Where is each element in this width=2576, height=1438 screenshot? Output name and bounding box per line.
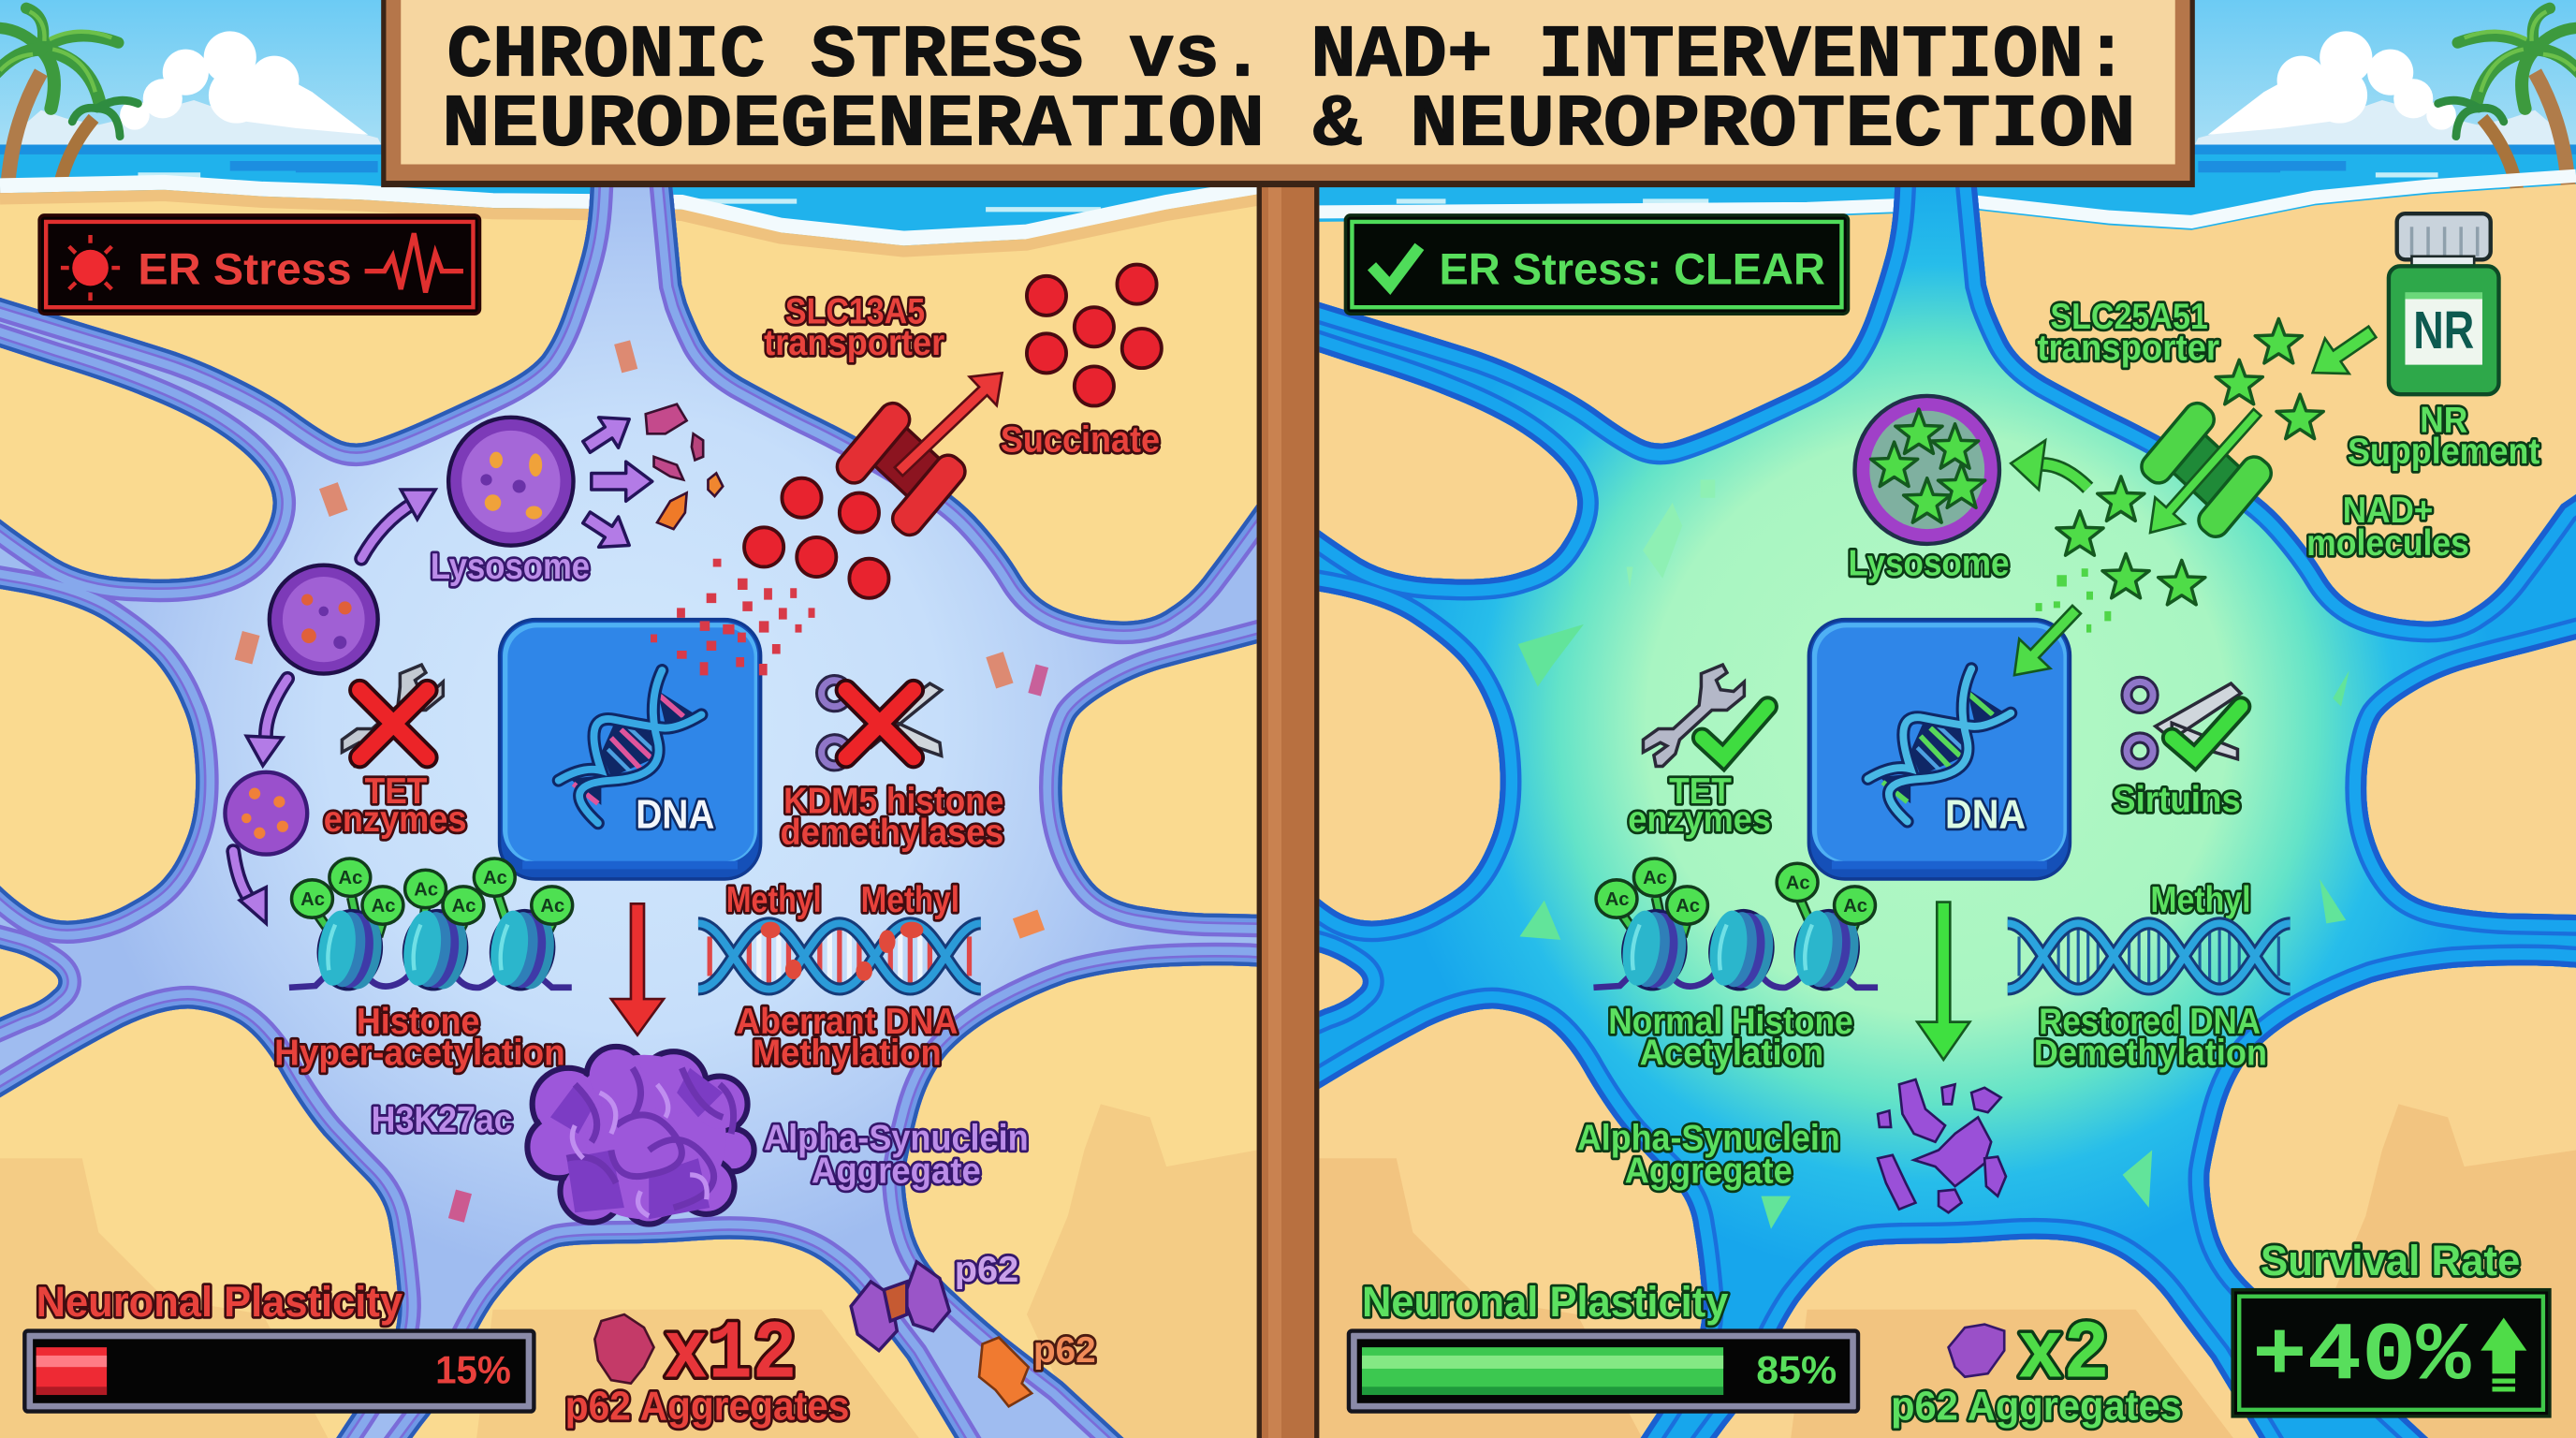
- succinate molecules outside: [1027, 265, 1162, 405]
- background: sky and sea: [0, 0, 2576, 246]
- arrows: lysosome pathway: [233, 490, 435, 923]
- arrow: NAD+ to nucleus: [1998, 594, 2092, 690]
- debris fragments: [646, 404, 723, 529]
- chart: normal nucleosomes: Ac: [1786, 873, 1810, 893]
- label: H3K27ac: H3K27ac: [372, 1100, 513, 1140]
- label: TET enzymes (left): TET: [365, 771, 428, 812]
- chart: hyper-acetylated nucleosomes: Ac: [452, 896, 476, 917]
- label: Normal Histone Acetylation: [1608, 1002, 1853, 1073]
- succinate molecules inside: [744, 478, 889, 598]
- background: left beach sand: [0, 183, 1265, 1438]
- label: SLC25A51 transporter: transporter: [2037, 328, 2219, 368]
- aggregate: broken fragments: [1878, 1079, 2006, 1212]
- neuron: left cell body and dendrites: [0, 148, 1314, 1438]
- icon: inhibited TET enzyme wrench: [342, 665, 443, 767]
- p62 orange clump: [979, 1338, 1032, 1406]
- icon: aberrantly methylated DNA: [698, 922, 981, 990]
- label: TET enzymes (left): [324, 771, 466, 840]
- stat box: +40% survival: [2232, 1290, 2550, 1416]
- arrow: protection pathway: [1917, 902, 1969, 1060]
- chart: hyper-acetylated nucleosomes: Ac: [372, 896, 395, 917]
- label: p62 upper: p62: [955, 1250, 1018, 1290]
- aggregate: large alpha-synuclein clump: [527, 1047, 754, 1224]
- chart: hyper-acetylated nucleosomes: Ac: [483, 868, 507, 888]
- label: Histone Hyper-acetylation: [274, 1002, 565, 1073]
- icon: NR supplement bottle: [2389, 213, 2499, 394]
- p62 knot on axon: [851, 1262, 949, 1351]
- neuron: right cell body and dendrites: [1255, 148, 2576, 1438]
- icon: heartbeat: [365, 233, 463, 292]
- wooden divider post: [1257, 165, 1319, 1438]
- gauge: neuronal plasticity 15%: [24, 1331, 534, 1412]
- panel: NAD+ intervention (right): [1255, 148, 2576, 1438]
- label: NR Supplement: NR: [2420, 401, 2467, 441]
- label: Aberrant DNA Methylation: Aberrant DNA: [736, 1002, 958, 1042]
- label: Alpha-Synuclein Aggregate (left): [764, 1119, 1029, 1192]
- gauge fill: [1362, 1347, 1723, 1395]
- label: NR Supplement: Supplement: [2348, 432, 2540, 472]
- label: Lysosome (stressed): Lysosome: [431, 547, 590, 587]
- label: Restored DNA Demethylation: Demethylation: [2034, 1033, 2267, 1073]
- label: Aberrant DNA Methylation: [736, 1002, 958, 1073]
- text: DNA: DNA: [636, 792, 714, 838]
- label: p62 lower: p62: [1033, 1330, 1096, 1371]
- label: Alpha-Synuclein Aggregate (left): Alpha-Synuclein: [764, 1119, 1029, 1159]
- icon: stressed DNA helix: [559, 670, 701, 823]
- stat: x12: x12: [664, 1310, 797, 1402]
- label: Survival Rate: Survival Rate: [2261, 1237, 2520, 1284]
- text: ER Stress: ER Stress: [138, 245, 352, 295]
- label: NAD+ molecules: [2306, 491, 2469, 564]
- lysosome: medium: [270, 565, 378, 674]
- damage flecks: [235, 340, 1048, 1223]
- value: 85%: [1756, 1348, 1837, 1392]
- label: Alpha-Synuclein Aggregate (right): Aggregate: [1625, 1152, 1793, 1192]
- transporter: left membrane channel: [832, 398, 971, 540]
- NAD+ molecules: stars: [2056, 318, 2323, 605]
- lysosome: large degrading: [448, 418, 574, 546]
- chart: normal nucleosomes: Ac: [1676, 896, 1700, 917]
- arrow: succinate export: [886, 359, 1016, 486]
- icon: active sirtuin scissors: [2127, 682, 2241, 764]
- label: Lysosome (restored): Lysosome: [1848, 543, 2009, 583]
- arrow: stress leads to aggregation: [611, 903, 664, 1035]
- chart: hyper-acetylated nucleosomes: Ac: [414, 879, 438, 900]
- label: NAD+ molecules: molecules: [2306, 523, 2469, 564]
- label: NAD+ molecules: NAD+: [2343, 491, 2433, 531]
- chart: normal nucleosomes: Ac: [1643, 868, 1667, 888]
- label: p62 Aggregates (right): p62 Aggregates: [1891, 1383, 2182, 1429]
- label: KDM5 histone demethylases: KDM5 histone: [783, 782, 1003, 822]
- text: ER Stress CLEAR: ER Stress: CLEAR: [1439, 245, 1825, 295]
- arrow: NAD+ import: [2135, 400, 2272, 546]
- background: right beach sand: [1319, 176, 2576, 1438]
- title line 2: NEURODEGENERATION & NEUROPROTECTION: [442, 82, 2136, 167]
- label: Alpha-Synuclein Aggregate (right): Alpha-Synuclein: [1577, 1119, 1840, 1159]
- label: Restored DNA Demethylation: Restored DNA: [2039, 1002, 2261, 1042]
- label: SLC25A51 transporter: SLC25A51: [2050, 297, 2208, 337]
- chart: hyper-acetylated nucleosomes: Ac: [339, 868, 362, 888]
- chart: hyper-acetylated nucleosomes: [289, 858, 573, 995]
- lysosome: restored with NAD+: [1855, 396, 1999, 544]
- transporter: right membrane channel: [2136, 398, 2276, 542]
- icon: up arrow: [2481, 1318, 2526, 1392]
- icon: p62 clump stat: [594, 1314, 654, 1384]
- label: TET enzymes (right): [1628, 771, 1771, 840]
- arrow: curved NAD+ to lysosome: [2011, 440, 2088, 490]
- icon: NR supplement bottle: NR: [2413, 301, 2474, 360]
- label: Neuronal Plasticity (left): Neuronal Plasticity: [37, 1278, 403, 1326]
- chart: normal nucleosomes: Ac: [1605, 889, 1630, 910]
- label: Normal Histone Acetylation: Acetylation: [1640, 1033, 1823, 1073]
- icon: healthy DNA helix: [1868, 668, 2011, 822]
- chart: hyper-acetylated nucleosomes: Ac: [540, 896, 564, 917]
- badge: ER Stress: [39, 215, 479, 314]
- nucleus: right DNA box: [1808, 620, 2070, 879]
- chart: normal nucleosomes: Ac: [1843, 896, 1867, 917]
- label: p62 Aggregates (left): p62 Aggregates: [565, 1383, 849, 1429]
- icon: active TET wrench: [1643, 665, 1767, 767]
- badge: ER Stress CLEAR: [1345, 215, 1848, 314]
- label: Succinate: Succinate: [1001, 420, 1160, 461]
- label: Sirtuins: Sirtuins: [2113, 780, 2241, 820]
- chart: hyper-acetylated nucleosomes: Ac: [300, 889, 325, 910]
- gauge: neuronal plasticity 85%: [1349, 1331, 1858, 1412]
- title sign: [381, 0, 2195, 187]
- label: SLC13A5 transporter: SLC13A5: [785, 292, 925, 332]
- healthy flecks: [1518, 479, 2349, 1229]
- text: DNA: DNA: [1945, 792, 2026, 838]
- icon: inhibited KDM5 scissors: [822, 681, 942, 766]
- chart: normal nucleosomes: [1593, 858, 1878, 995]
- label: Methyl (right): Methyl: [2150, 880, 2250, 920]
- label: Histone Hyper-acetylation: Hyper-acetylation: [274, 1033, 565, 1073]
- label: Alpha-Synuclein Aggregate (right): [1577, 1119, 1840, 1192]
- nucleus: left DNA box: [500, 620, 761, 879]
- title line 1: CHRONIC STRESS vs. NAD+ INTERVENTION:: [446, 14, 2130, 98]
- label: SLC13A5 transporter: [764, 292, 944, 363]
- label: Aberrant DNA Methylation: Methylation: [753, 1033, 942, 1073]
- stat: x2: x2: [2017, 1310, 2110, 1402]
- label: Normal Histone Acetylation: Normal Histone: [1608, 1002, 1853, 1042]
- labels: methyl groups: [726, 880, 959, 920]
- labels: methyl groups: Methyl: [861, 880, 959, 920]
- label: Alpha-Synuclein Aggregate (left): Aggregate: [812, 1152, 981, 1192]
- label: SLC13A5 transporter: transporter: [764, 323, 944, 363]
- icon: p62 small clump: [1949, 1325, 2004, 1377]
- lysosome: small: [225, 772, 307, 855]
- label: TET enzymes (left): enzymes: [324, 800, 466, 840]
- label: TET enzymes (right): enzymes: [1628, 800, 1771, 840]
- green particles: [2036, 568, 2111, 633]
- label: SLC25A51 transporter: [2037, 297, 2219, 368]
- icon: restored DNA: [2008, 923, 2291, 990]
- label: Histone Hyper-acetylation: Histone: [357, 1002, 479, 1042]
- arrow: supplement to NAD+: [2301, 315, 2384, 390]
- panel: chronic stress (left): [0, 148, 1314, 1438]
- label: Neuronal Plasticity (right): Neuronal Plasticity: [1362, 1278, 1729, 1326]
- label: TET enzymes (right): TET: [1669, 771, 1732, 812]
- value: +40%: [2252, 1311, 2471, 1403]
- value: 15%: [435, 1348, 511, 1392]
- icon: check: [1372, 246, 1419, 286]
- label: KDM5 histone demethylases: demethylases: [781, 813, 1003, 853]
- arrows: lysosome output: [577, 404, 652, 561]
- gauge fill: [37, 1347, 107, 1395]
- red particles: [651, 559, 815, 675]
- label: Restored DNA Demethylation: [2034, 1002, 2267, 1073]
- label: NR Supplement: [2348, 401, 2540, 472]
- labels: methyl groups: Methyl: [726, 880, 822, 920]
- label: KDM5 histone demethylases: [781, 782, 1003, 853]
- icon: stress burst: [61, 235, 120, 301]
